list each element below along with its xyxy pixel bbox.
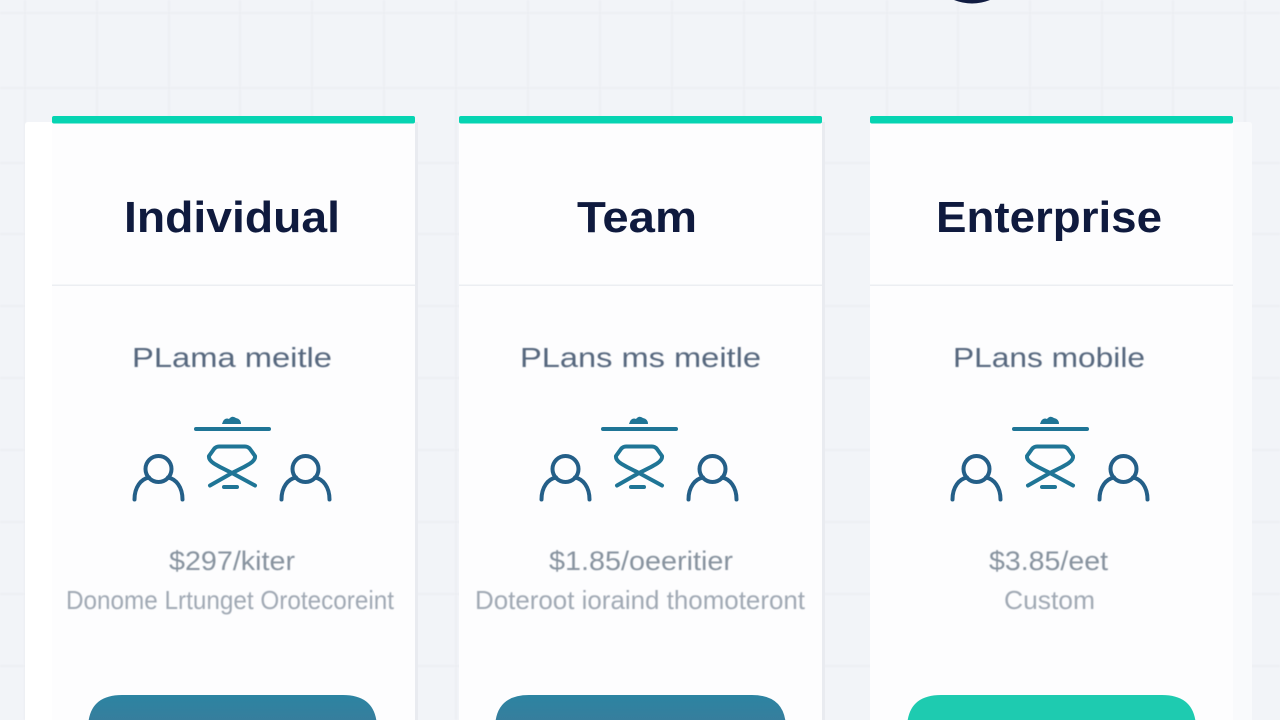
- icon: team group: [952, 417, 1148, 500]
- description: Donome Lrtunget Orotecoreint: [66, 585, 395, 615]
- button: [907, 695, 1196, 720]
- heading: Team: Team: [577, 193, 697, 242]
- accent bar: [870, 116, 1233, 124]
- white strip right of third card: [1230, 122, 1252, 720]
- description: Doteroot ioraind thomoteront: [475, 585, 806, 615]
- heading: Enterprise: Enterprise: [936, 193, 1162, 242]
- accent bar: [459, 116, 822, 124]
- icon: team group: [542, 417, 736, 500]
- price: $3.85/eet: [989, 546, 1109, 576]
- card body: [870, 118, 1233, 720]
- description: Custom: [1004, 585, 1095, 615]
- subtitle: PLans mobile: [953, 342, 1145, 373]
- card shadow: [415, 122, 418, 720]
- divider: [459, 284, 822, 286]
- divider: [870, 284, 1233, 286]
- price: $297/kiter: [169, 546, 295, 576]
- button: [495, 695, 786, 720]
- subtitle: PLans ms meitle: [520, 342, 761, 373]
- panel: Team plan: [459, 116, 825, 720]
- card body: [459, 118, 822, 720]
- subtitle: PLama meitle: [132, 342, 332, 373]
- panel: Individual plan: [52, 116, 418, 720]
- price: $1.85/oeeritier: [549, 546, 733, 576]
- card body: [52, 118, 415, 720]
- white strip left of first card: [25, 122, 55, 720]
- icon: team group: [134, 417, 330, 500]
- heading: Individual: Individual: [124, 193, 340, 242]
- decorative top circle: [954, 0, 990, 4]
- card shadow: [822, 122, 825, 720]
- accent bar: [52, 116, 415, 124]
- button: [88, 695, 377, 720]
- panel: Enterprise plan: [870, 116, 1233, 720]
- divider: [52, 284, 415, 286]
